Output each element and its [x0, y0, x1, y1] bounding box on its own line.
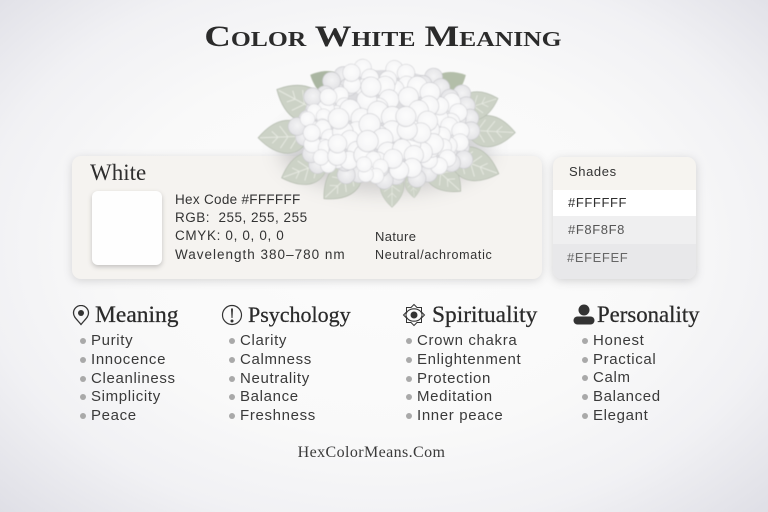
list: meaning items: Peace: [91, 407, 137, 424]
list: personality items: Balanced: [593, 388, 661, 405]
neutral label: Neutral/achromatic: [375, 248, 493, 262]
column: meaning: [72, 302, 179, 424]
flower head base: [302, 70, 470, 178]
heading: Personality: Personality: [597, 302, 700, 327]
column: personality: [574, 302, 700, 424]
shade row EFEFEF: #EFEFEF: [567, 250, 628, 265]
list: personality items: Calm: [593, 369, 631, 386]
list: spirituality items: Inner peace: [417, 407, 503, 424]
heading: Spirituality: Spirituality: [432, 302, 537, 328]
list: psychology items: Calmness: [240, 351, 312, 368]
shade row FFFFFF: [553, 190, 696, 216]
shade row EFEFEF: [553, 244, 696, 279]
shades heading: Shades: [569, 164, 617, 179]
list: personality items: Practical: [593, 351, 656, 368]
icon: location pin: [72, 305, 90, 326]
colour swatch: [92, 191, 162, 265]
icon: person: [574, 304, 594, 324]
heading: Meaning: Meaning: [95, 302, 179, 328]
footer: website credit: HexColorMeans.Com: [298, 444, 445, 461]
icon: crown chakra: [402, 304, 426, 326]
shade row F8F8F8: #F8F8F8: [568, 222, 625, 237]
CMYK value: CMYK: 0, 0, 0, 0: [175, 228, 284, 243]
list: personality items: [582, 332, 661, 424]
flower illustration: white hydrangea: [258, 58, 516, 208]
list: meaning items: Innocence: [91, 351, 166, 368]
flower shadow: [280, 108, 490, 192]
leaves: [257, 63, 516, 210]
heading: Psychology: Psychology: [248, 302, 351, 327]
panel heading: White: White: [90, 160, 146, 185]
shade row FFFFFF: #FFFFFF: [568, 195, 627, 210]
list: psychology items: Balance: [240, 388, 299, 405]
list: spirituality items: Enlightenment: [417, 351, 521, 368]
list: psychology items: [229, 332, 316, 424]
panel: shades: [553, 157, 696, 279]
nature label: Nature: [375, 229, 416, 244]
list: spirituality items: Crown chakra: [417, 332, 517, 349]
list: personality items: Honest: [593, 332, 644, 349]
RGB value: RGB: 255, 255, 255: [175, 210, 308, 225]
florets: [285, 55, 489, 196]
list: meaning items: Cleanliness: [91, 370, 176, 387]
list: psychology items: Freshness: [240, 407, 316, 424]
list: spirituality items: Meditation: [417, 388, 493, 405]
list: psychology items: Clarity: [240, 332, 287, 349]
list: spirituality items: Protection: [417, 370, 491, 387]
list: meaning items: Simplicity: [91, 388, 161, 405]
wavelength: Wavelength 380–780 nm: [175, 247, 346, 262]
list: meaning items: [80, 332, 176, 424]
list: psychology items: Neutrality: [240, 370, 310, 387]
list: spirituality items: [406, 332, 521, 424]
column: spirituality: [402, 302, 538, 424]
column: psychology: [222, 302, 351, 424]
hex code: Hex Code #FFFFFF: [175, 192, 301, 207]
panel: white colour details: [72, 156, 542, 279]
shade row F8F8F8: [553, 216, 696, 244]
title: Color White Meaning: [204, 20, 562, 53]
list: personality items: Elegant: [593, 407, 648, 424]
icon: exclamation circle: [222, 304, 242, 326]
list: meaning items: Purity: [91, 332, 133, 349]
